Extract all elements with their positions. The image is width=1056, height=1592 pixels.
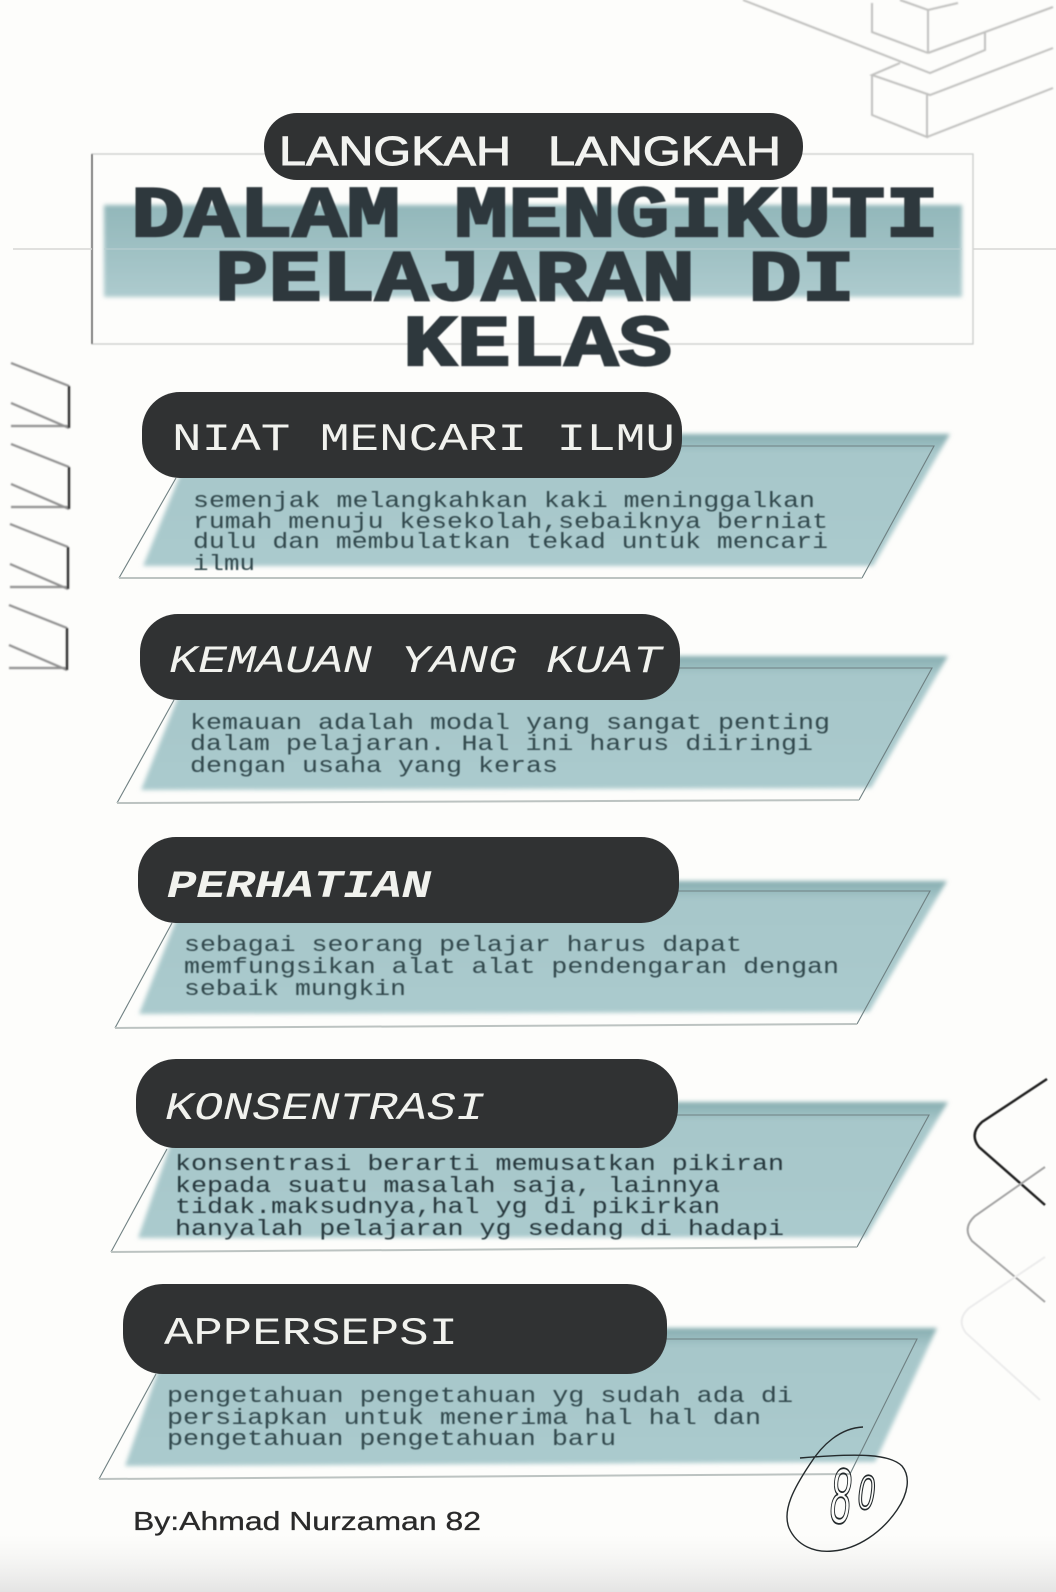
decoration: right chevrons — [962, 1079, 1047, 1400]
card 3 body text: memfungsikan alat alat pendengaran dengan — [184, 955, 839, 980]
card 1 body text: rumah menuju kesekolah,sebaiknya berniat — [193, 510, 828, 535]
title frame — [92, 154, 973, 344]
card 4 body text: tidak.maksudnya,hal yg di pikirkan — [175, 1195, 720, 1220]
card 2 teal panel — [141, 656, 948, 790]
title block — [13, 113, 1056, 387]
card 5 teal panel — [125, 1328, 937, 1466]
handwritten score 80: 0 — [854, 1464, 879, 1521]
card: appersepsi — [99, 1284, 937, 1479]
card 5 body text — [167, 1384, 793, 1452]
card: konsentrasi — [111, 1059, 948, 1252]
card 4 body text: hanyalah pelajaran yg sedang di hadapi — [175, 1217, 784, 1242]
title pill — [264, 113, 803, 180]
main title: DALAM MENGIKUTI — [131, 176, 939, 258]
card 3 body text: sebaik mungkin — [184, 977, 406, 1002]
title pill: LANGKAH — [548, 128, 781, 174]
card 3 teal panel — [139, 881, 947, 1014]
card 1 body text: ilmu — [193, 552, 255, 577]
card 1 body text: dulu dan membulatkan tekad untuk mencari — [193, 530, 828, 555]
card 5 heading pill — [123, 1284, 667, 1374]
handwritten score 80: 8 — [826, 1452, 856, 1542]
card 4 body text: konsentrasi berarti memusatkan pikiran — [175, 1152, 784, 1177]
card: perhatian — [115, 837, 947, 1028]
handwritten score 80 — [787, 1427, 907, 1551]
card 2 body text: dengan usaha yang keras — [190, 754, 558, 779]
main title: PELAJARAN DI — [215, 240, 855, 322]
card 5 heading pill: APPERSEPSI — [164, 1312, 458, 1356]
card: niat mencari ilmu — [119, 392, 950, 578]
card 5 body text: pengetahuan pengetahuan baru — [167, 1427, 616, 1452]
card 4 heading pill: KONSENTRASI — [165, 1087, 485, 1131]
card 4 body text — [175, 1152, 784, 1242]
card 1 body text — [193, 489, 828, 577]
card 5 body text: persiapkan untuk menerima hal hal dan — [167, 1406, 761, 1431]
card 1 heading pill: NIAT MENCARI ILMU — [172, 418, 675, 462]
card 1 teal panel — [143, 434, 950, 566]
card 3 heading pill: PERHATIAN — [167, 865, 432, 909]
decoration: isometric blocks — [743, 0, 1053, 137]
card 1 body text: semenjak melangkahkan kaki meninggalkan — [193, 489, 815, 514]
card: kemauan yang kuat — [117, 614, 948, 803]
card 5 body text: pengetahuan pengetahuan yg sudah ada di — [167, 1384, 793, 1409]
title pill: LANGKAH — [279, 128, 511, 174]
card 3 heading pill — [138, 837, 679, 923]
decoration: left zigzag marks — [9, 363, 69, 670]
card 2 body text: kemauan adalah modal yang sangat penting — [190, 711, 830, 736]
card 2 body text — [190, 711, 830, 779]
credit line: By:Ahmad Nurzaman 82 — [133, 1506, 481, 1536]
card 3 body text: sebagai seorang pelajar harus dapat — [184, 933, 742, 958]
card 2 body text: dalam pelajaran. Hal ini harus diiringi — [190, 732, 813, 757]
card 4 heading pill — [136, 1059, 678, 1148]
title teal band — [104, 205, 962, 297]
main title: KELAS — [403, 305, 672, 387]
card 4 teal panel — [138, 1102, 948, 1238]
card 2 heading pill — [140, 614, 680, 700]
card 4 body text: kepada suatu masalah saja, lainnya — [175, 1174, 720, 1199]
card 1 heading pill — [142, 392, 682, 478]
main title — [131, 176, 939, 387]
card 3 body text — [184, 933, 839, 1002]
card 2 heading pill: KEMAUAN YANG KUAT — [169, 640, 664, 684]
